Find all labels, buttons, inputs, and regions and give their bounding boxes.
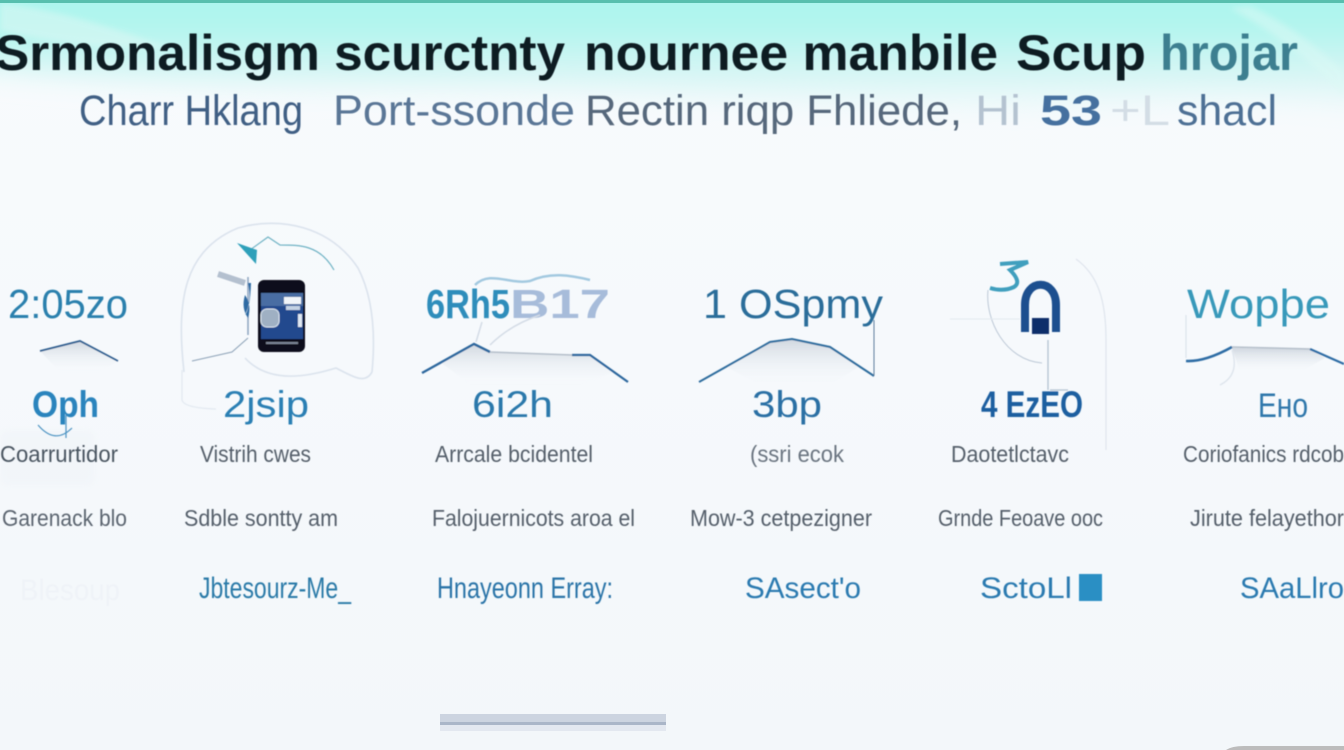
title: Scup <box>1016 25 1146 81</box>
subtitle: Rectin riqp Fhliede, <box>585 87 962 135</box>
subtitle: Port-ssonde <box>333 87 575 135</box>
column 1: stat <box>0 281 128 607</box>
title: Srmonalisgm scurctnty <box>0 25 565 81</box>
description: Falojuernicots aroa el <box>432 505 635 531</box>
value: 3bp <box>752 384 822 425</box>
icon tail <box>38 415 72 438</box>
subtitle: 53 <box>1040 87 1102 135</box>
column 5: lock <box>938 259 1106 605</box>
title: nournee manbile <box>584 25 998 81</box>
subtitle: +L <box>1110 87 1170 135</box>
column 2: phone <box>181 223 373 605</box>
link: Hnayeonn Erray: <box>437 572 613 605</box>
corner tab <box>1226 746 1344 750</box>
heading number: 2:05zo <box>8 281 128 327</box>
link: Blesoup <box>20 574 120 607</box>
curve shadow <box>40 341 118 372</box>
value: Oph <box>32 384 99 425</box>
column 6: stat <box>1183 281 1344 605</box>
label: Arrcale bcidentel <box>435 441 593 467</box>
title: hrojar <box>1160 25 1298 81</box>
column 3: stat <box>422 275 635 605</box>
column 4: stat <box>690 281 884 605</box>
description: Grnde Feoave ooc <box>938 505 1103 531</box>
link: SAaLlro <box>1240 572 1344 605</box>
link: SAsect'o <box>745 572 861 605</box>
subtitle: Hi <box>975 87 1021 135</box>
value: 2jsip <box>223 384 309 425</box>
value: Ено <box>1258 387 1308 425</box>
curve <box>699 339 874 382</box>
value: 6i2h <box>472 384 553 425</box>
link: SctoLl <box>980 572 1072 605</box>
column 3: stat: B17 <box>510 281 610 327</box>
label: Daotetlctavc <box>951 441 1069 467</box>
subtitle <box>79 87 1277 135</box>
subtitle: shacl <box>1177 87 1277 135</box>
link: Jbtesourz-Me_ <box>199 572 352 605</box>
icon: swirl <box>475 275 590 285</box>
description: Garenack blo <box>2 505 127 531</box>
curve shadow <box>725 339 860 385</box>
heading: Wopþe <box>1187 281 1330 327</box>
label: Coarrurtidor <box>0 441 118 467</box>
bottom bar <box>440 714 666 731</box>
label: Vistrih cwes <box>200 441 311 467</box>
heading number: 6Rh5 <box>426 281 510 327</box>
heading number: 1 OSpmy <box>703 281 884 327</box>
curve <box>40 341 118 361</box>
title <box>0 25 1298 81</box>
badge <box>1079 574 1102 601</box>
icon: padlock <box>950 259 1106 450</box>
description: Sdble sontty am <box>184 505 338 531</box>
label: (ssri ecok <box>750 441 844 467</box>
subtitle: Charr Hklang <box>79 87 303 135</box>
curve shadow <box>1232 348 1325 372</box>
curve <box>1186 347 1232 361</box>
description: Mow-3 cetpezigner <box>690 505 872 531</box>
curve <box>422 344 490 373</box>
icon: phone in circle <box>181 223 373 409</box>
curve shadow <box>440 344 615 384</box>
value: 4 EzEO <box>981 384 1083 425</box>
